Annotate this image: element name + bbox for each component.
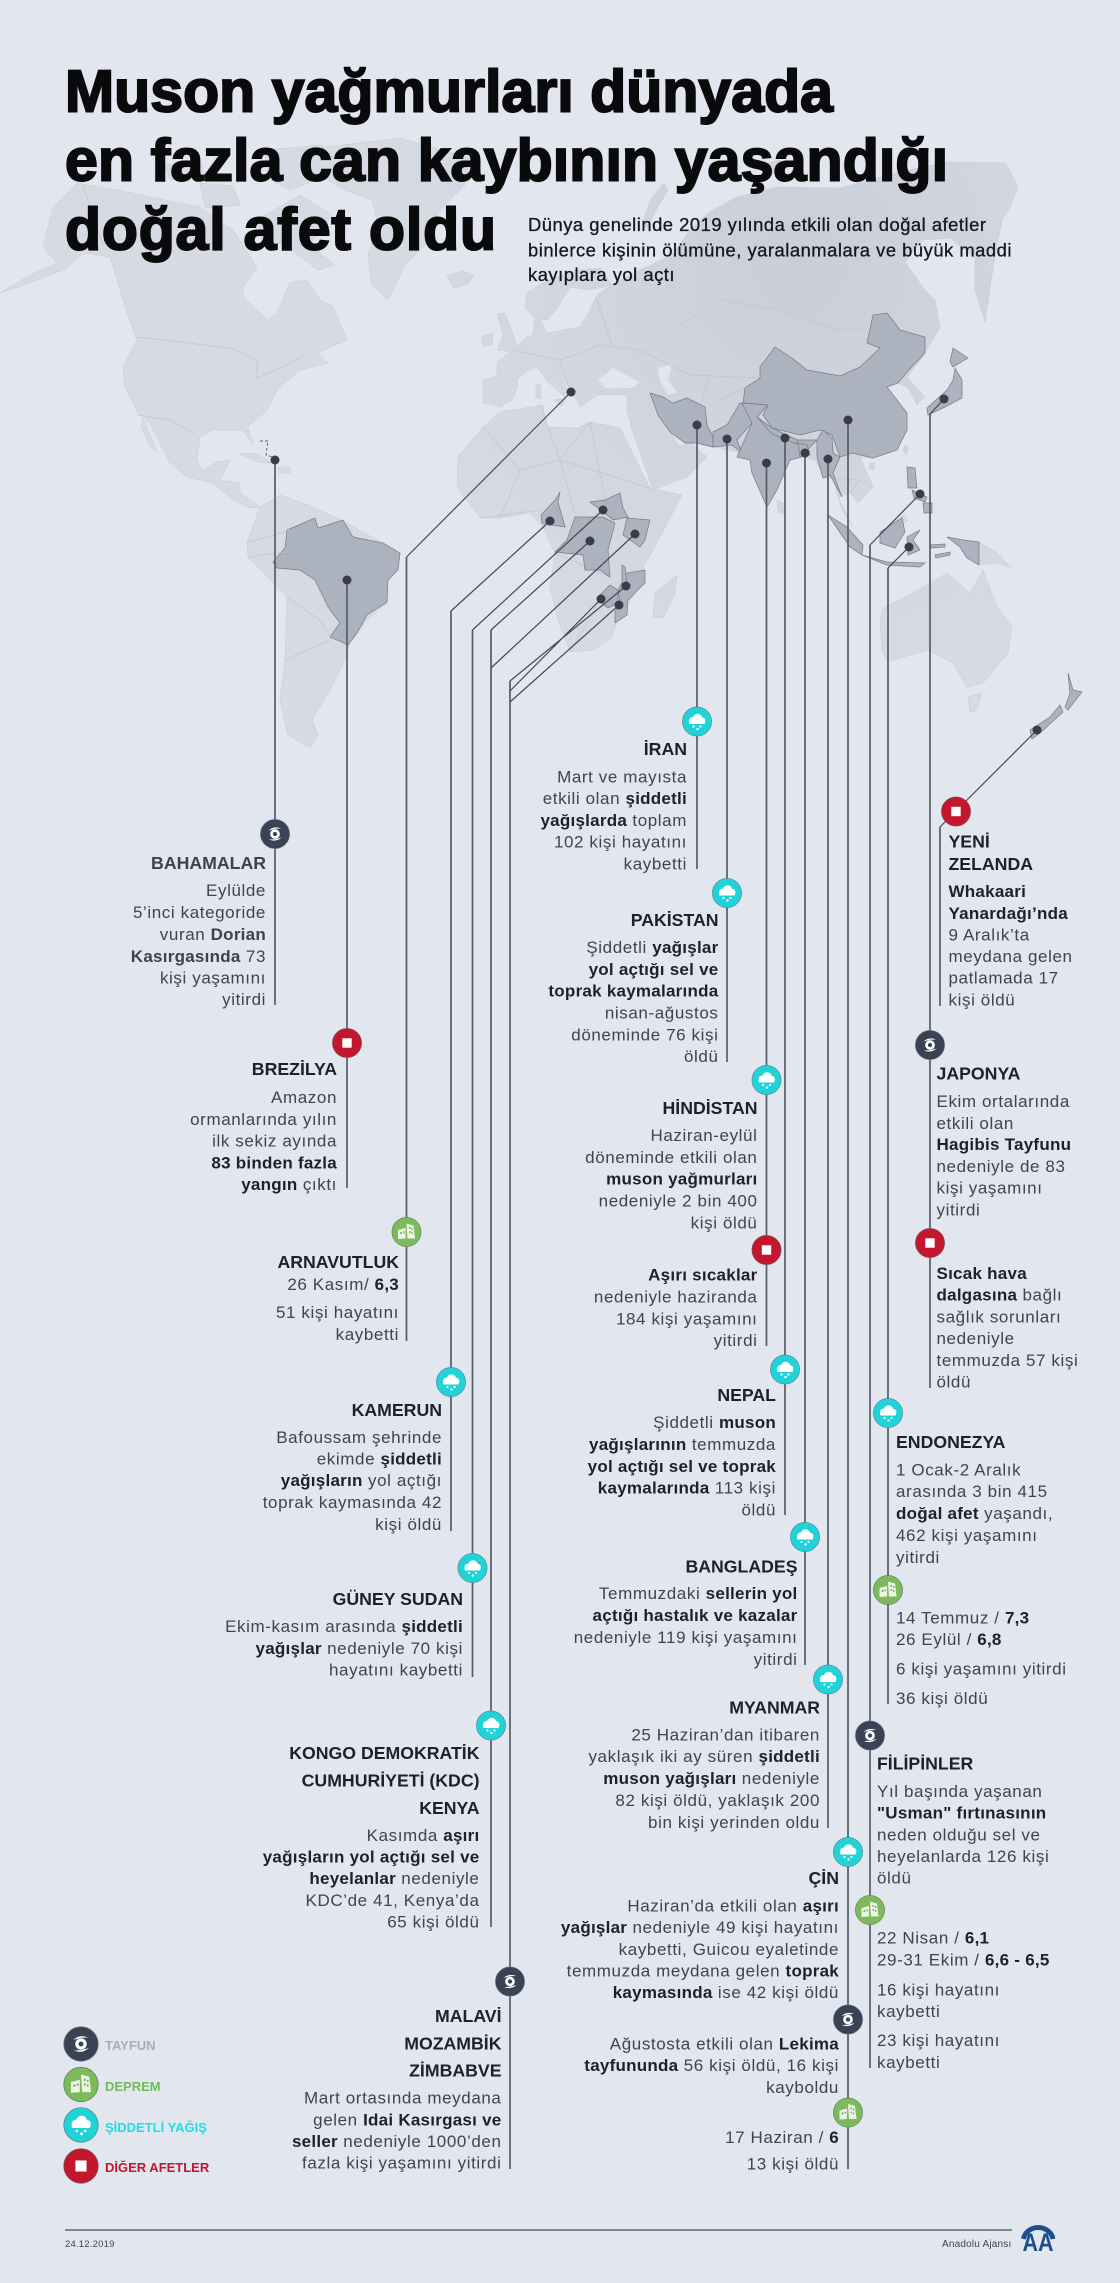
- map: Zimbabwe: [598, 585, 618, 608]
- text: Philippines earthquakes: 29-31 Ekim / 6,6 - 6,5: [877, 1950, 1050, 1970]
- map: Sumatra and Java: [828, 515, 925, 567]
- text: India monsoon: nedeniyle 2 bin 400: [599, 1192, 758, 1210]
- text: Indonesia disasters: [896, 1432, 1053, 1567]
- text: Myanmar: bin kişi yerinden oldu: [648, 1813, 820, 1832]
- text: Myanmar: 82 kişi öldü, yaklaşık 200: [615, 1791, 820, 1810]
- text: China typhoon: kayboldu: [766, 2078, 839, 2097]
- text: South Sudan: GÜNEY SUDAN: [333, 1589, 463, 1609]
- text: India heat: yitirdi: [714, 1331, 758, 1350]
- text: Indonesia disasters: arasında 3 bin 415: [896, 1482, 1048, 1501]
- text: DRC and Kenya: Kasımda aşırı: [367, 1826, 480, 1845]
- text: Albania: ARNAVUTLUK: [277, 1252, 399, 1272]
- text: Pakistan: öldü: [684, 1047, 718, 1066]
- text: Albania: [276, 1252, 399, 1344]
- text: Bangladesh: Temmuzdaki sellerin yol: [599, 1584, 798, 1603]
- icon: heavy rain Iran: [682, 707, 712, 736]
- map: Madagascar: [653, 575, 677, 618]
- text: Iran: yağışlarda toplam: [540, 811, 687, 830]
- icon: typhoon Bahamas: [260, 819, 290, 849]
- text: DRC and Kenya: yağışların yol açtığı sel ve: [263, 1848, 480, 1866]
- text: Indonesia earthquakes: 14 Temmuz / 7,3: [896, 1608, 1029, 1628]
- text: Japan typhoon: yitirdi: [936, 1200, 980, 1220]
- text: Bangladesh: [574, 1556, 798, 1669]
- footer date: 24.12.2019: [65, 2239, 115, 2250]
- map: Myanmar: [817, 430, 842, 497]
- map: South America: [247, 495, 400, 748]
- text: Brazil: ilk sekiz ayında: [212, 1132, 337, 1150]
- text: Nepal: NEPAL: [717, 1385, 776, 1405]
- text: Myanmar: MYANMAR: [729, 1698, 820, 1718]
- text: Philippines earthquakes: [877, 1928, 1050, 2072]
- text: Pakistan: Şiddetli yağışlar: [586, 938, 719, 957]
- text: Bangladesh: BANGLADEŞ: [685, 1556, 798, 1576]
- icon: typhoon Japan: [915, 1030, 945, 1060]
- map: Indonesian small islands: [930, 544, 950, 558]
- text: Indonesia disasters: yitirdi: [896, 1548, 940, 1567]
- text: Japan typhoon: JAPONYA: [936, 1064, 1021, 1084]
- map: Sulawesi: [907, 530, 920, 555]
- icon: earthquake Philippines: [855, 1895, 885, 1925]
- subtitle: kayıplara yol açtı: [528, 264, 675, 285]
- icon: heavy rain DRC Kenya: [476, 1711, 506, 1740]
- text: Cameroon: toprak kaymasında 42: [263, 1493, 442, 1512]
- legend: [64, 2027, 210, 2183]
- text: China rains: kaymasında ise 42 kişi öldü: [613, 1983, 839, 2002]
- text: Philippines storm: "Usman" fırtınasının: [877, 1804, 1046, 1822]
- text: New Zealand: [948, 832, 1073, 1010]
- map: Kenya: [623, 518, 650, 547]
- text: New Zealand: Yanardağı’nda: [948, 904, 1068, 923]
- text: China rains: temmuzda meydana gelen toprak: [567, 1962, 839, 1980]
- text: Pakistan: PAKİSTAN: [631, 910, 718, 930]
- text: Japan heat wave: Sıcak hava: [936, 1264, 1027, 1283]
- text: Philippines earthquakes: 22 Nisan / 6,1: [877, 1928, 989, 1948]
- text: Japan typhoon: [936, 1064, 1071, 1220]
- icon: heavy rain China: [833, 1837, 863, 1867]
- text: Pakistan: döneminde 76 kişi: [571, 1026, 718, 1044]
- text: China earthquake: 13 kişi öldü: [747, 2154, 839, 2174]
- map: Iran: [650, 393, 713, 447]
- text: Philippines storm: [877, 1754, 1049, 1888]
- text: Nepal: kaymalarında 113 kişi: [598, 1478, 776, 1498]
- text: Japan typhoon: nedeniyle de 83: [936, 1157, 1066, 1176]
- text: Iran: [540, 739, 687, 874]
- text: Malawi Mozambique Zimbabwe: MOZAMBİK: [404, 2034, 502, 2054]
- legend: earthquake: [64, 2067, 161, 2102]
- map: Sri Lanka: [777, 500, 784, 513]
- text: Cameroon: yağışların yol açtığı: [281, 1471, 442, 1490]
- map: Africa: [457, 405, 682, 652]
- map: Indonesian New Guinea: [947, 537, 979, 565]
- text: Pakistan: nisan-ağustos: [605, 1004, 718, 1022]
- text: Japan heat wave: sağlık sorunları: [936, 1308, 1061, 1326]
- text: China rains: Haziran’da etkili olan aşırı: [627, 1896, 839, 1916]
- map: Borneo: [880, 518, 905, 548]
- map: Malaysia part of Borneo: [880, 515, 908, 535]
- text: Indonesia earthquakes: 36 kişi öldü: [896, 1689, 988, 1708]
- text: Indonesia disasters: 1 Ocak-2 Aralık: [896, 1460, 1021, 1480]
- text: Myanmar: yaklaşık iki ay süren şiddetli: [588, 1747, 820, 1766]
- text: China rains: [561, 1868, 839, 2002]
- text: Cameroon: Bafoussam şehrinde: [276, 1428, 442, 1447]
- map: Philippines: [907, 467, 932, 513]
- text: Bahamas: BAHAMALAR: [151, 853, 266, 873]
- icon: heavy rain Nepal: [770, 1355, 800, 1384]
- text: Philippines storm: neden olduğu sel ve: [877, 1826, 1041, 1844]
- icon: other disaster Brazil: [332, 1028, 362, 1058]
- text: Japan typhoon: Ekim ortalarında: [936, 1092, 1070, 1111]
- title: doğal afet oldu: [65, 196, 496, 262]
- map: Eurasia: [483, 162, 1018, 527]
- text: Cameroon: kişi öldü: [375, 1515, 442, 1534]
- text: Bangladesh: nedeniyle 119 kişi yaşamını: [574, 1628, 798, 1647]
- map: Taiwan and Hainan: [869, 445, 909, 470]
- map: New Zealand: [1030, 673, 1082, 739]
- text: Nepal: Şiddetli muson: [653, 1413, 776, 1432]
- icon: heavy rain Indonesia: [873, 1398, 903, 1428]
- legend: other disasters: DİĞER AFETLER: [105, 2160, 210, 2175]
- map: Bangladesh: [798, 443, 810, 457]
- map: Pakistan: [713, 403, 752, 453]
- text: Japan heat wave: [936, 1264, 1078, 1392]
- text: Brazil: BREZİLYA: [252, 1059, 337, 1079]
- text: New Zealand: meydana gelen: [948, 947, 1073, 966]
- text: New Zealand: patlamada 17: [948, 968, 1059, 988]
- legend: earthquake: DEPREM: [105, 2079, 161, 2094]
- map: Japan: [927, 348, 968, 415]
- map: Scandinavia: [525, 268, 612, 320]
- text: Philippines earthquakes: kaybetti: [877, 2002, 940, 2021]
- text: Japan heat wave: temmuzda 57 kişi: [936, 1351, 1078, 1370]
- subtitle: Dünya genelinde 2019 yılında etkili olan doğal afetler: [528, 214, 986, 235]
- text: India heat: nedeniyle haziranda: [594, 1288, 758, 1306]
- text: India heat: [594, 1266, 758, 1350]
- map: Malawi: [622, 565, 627, 588]
- icon: typhoon Malawi Mozambique Zimbabwe: [495, 1967, 525, 1996]
- map: Papua New Guinea: [979, 542, 1012, 568]
- text: Nepal: öldü: [741, 1500, 776, 1520]
- map: China: [743, 313, 925, 458]
- text: South Sudan: Ekim-kasım arasında şiddetli: [225, 1617, 463, 1636]
- text: Bahamas: [131, 853, 266, 1009]
- map: Novaya Zemlya and Arctic islands: [642, 160, 785, 228]
- text: Albania: 51 kişi hayatını: [276, 1303, 399, 1322]
- map: Bahamas: [260, 441, 276, 458]
- text: DRC and Kenya: CUMHURİYETİ (KDC): [302, 1770, 480, 1790]
- text: New Zealand: 9 Aralık’ta: [948, 926, 1030, 944]
- text: Philippines storm: FİLİPİNLER: [877, 1754, 974, 1774]
- text: Bangladesh: yitirdi: [754, 1650, 798, 1669]
- text: Iran: kaybetti: [624, 854, 687, 874]
- icon: Anadolu Agency logo: AA: [1022, 2229, 1054, 2257]
- legend: heavy rain: [64, 2108, 207, 2142]
- map: North America: [0, 183, 347, 508]
- text: Philippines earthquakes: kaybetti: [877, 2053, 940, 2072]
- icon: typhoon China: [833, 2005, 863, 2034]
- text: Iran: Mart ve mayısta: [557, 768, 687, 786]
- text: Bahamas: yitirdi: [222, 990, 266, 1009]
- icon: earthquake China: [833, 2098, 863, 2127]
- text: New Zealand: ZELANDA: [948, 854, 1033, 874]
- footer agency name: Anadolu Ajansı: [942, 2239, 1012, 2250]
- text: Albania: 26 Kasım/ 6,3: [287, 1275, 399, 1294]
- map: Caspian Sea: [658, 364, 677, 395]
- text: Myanmar: [588, 1698, 820, 1832]
- text: Bahamas: Eylülde: [206, 881, 266, 900]
- map: Cameroon: [541, 492, 565, 527]
- text: Iran: etkili olan şiddetli: [543, 789, 687, 808]
- text: India heat: 184 kişi yaşamını: [616, 1310, 758, 1328]
- text: India monsoon: Haziran-eylül: [650, 1126, 758, 1145]
- map: India: [737, 403, 817, 507]
- title: en fazla can kaybının yaşandığı: [65, 128, 948, 194]
- text: Pakistan: yol açtığı sel ve: [589, 960, 718, 979]
- icon: other disaster New Zealand: [941, 797, 971, 826]
- text: India monsoon: HİNDİSTAN: [663, 1098, 758, 1118]
- icon: earthquake Indonesia: [873, 1575, 903, 1605]
- map: Nepal: [757, 417, 797, 444]
- text: Malawi Mozambique Zimbabwe: Mart ortasında meydana: [304, 2088, 502, 2108]
- text: China rains: kaybetti, Guicou eyaletinde: [619, 1940, 839, 1959]
- icon: typhoon Philippines: [855, 1721, 885, 1750]
- text: Japan typhoon: etkili olan: [936, 1114, 1014, 1133]
- text: Brazil: [190, 1059, 337, 1194]
- text: South Sudan: hayatını kaybetti: [329, 1660, 463, 1680]
- subtitle: [528, 214, 1012, 285]
- map: Mediterranean islands: [536, 385, 566, 406]
- text: Nepal: yağışlarının temmuzda: [589, 1435, 776, 1454]
- text: China typhoon: tayfununda 56 kişi öldü, 16 kişi: [584, 2056, 839, 2075]
- map: border lines: [83, 185, 890, 660]
- title: [65, 58, 948, 262]
- text: Nepal: yol açtığı sel ve toprak: [588, 1457, 776, 1476]
- text: China rains: ÇİN: [809, 1868, 839, 1888]
- map: Brazil: [273, 518, 400, 645]
- connector lines: [270, 388, 1042, 2169]
- text: Cameroon: ekimde şiddetli: [317, 1450, 442, 1468]
- text: India monsoon: [585, 1098, 758, 1232]
- text: Philippines earthquakes: 16 kişi hayatını: [877, 1980, 1000, 2000]
- text: Brazil: Amazon: [271, 1088, 337, 1107]
- text: China typhoon: [584, 2034, 839, 2097]
- text: Iran: 102 kişi hayatını: [554, 832, 687, 852]
- text: Philippines storm: Yıl başında yaşanan: [877, 1782, 1042, 1801]
- text: Bahamas: 5’inci kategoride: [133, 903, 266, 922]
- text: DRC and Kenya: KONGO DEMOKRATİK: [289, 1743, 480, 1763]
- text: Nepal: [588, 1385, 776, 1520]
- text: Japan heat wave: nedeniyle: [936, 1329, 1015, 1348]
- text: Bangladesh: açtığı hastalık ve kazalar: [593, 1606, 798, 1625]
- text: DRC and Kenya: heyelanlar nedeniyle: [309, 1869, 480, 1888]
- icon: heavy rain Cameroon: [436, 1367, 466, 1397]
- subtitle: binlerce kişinin ölümüne, yaralanmalara ve büyük maddi: [528, 240, 1012, 260]
- text: Philippines earthquakes: 23 kişi hayatını: [877, 2031, 1000, 2050]
- text: New Zealand: kişi öldü: [948, 990, 1015, 1010]
- text: New Zealand: Whakaari: [948, 882, 1026, 901]
- footer rule: [65, 2229, 1012, 2231]
- map: South Sudan: [590, 493, 628, 520]
- map: British Isles: [482, 313, 517, 352]
- title: Muson yağmurları dünyada: [65, 58, 834, 124]
- map: Black Sea: [598, 368, 640, 388]
- text: DRC and Kenya: [263, 1743, 480, 1932]
- text: Pakistan: toprak kaymalarında: [548, 982, 719, 1000]
- text: South Sudan: [225, 1589, 463, 1680]
- legend: heavy rain: ŞİDDETLİ YAĞIŞ: [105, 2120, 207, 2135]
- text: China typhoon: Ağustosta etkili olan Lekima: [610, 2034, 839, 2054]
- text: Philippines storm: öldü: [877, 1868, 912, 1888]
- icon: heavy rain Pakistan: [712, 878, 742, 908]
- text: China earthquake: 17 Haziran / 6: [725, 2128, 839, 2147]
- legend: typhoon: TAYFUN: [105, 2038, 156, 2053]
- text: Malawi Mozambique Zimbabwe: MALAVİ: [435, 2006, 502, 2026]
- text: Indonesia earthquakes: 6 kişi yaşamını yitirdi: [896, 1660, 1067, 1678]
- map: Baja California: [141, 419, 157, 452]
- text: Malawi Mozambique Zimbabwe: seller nedeniyle 1000’den: [292, 2132, 502, 2151]
- legend: other disasters: [64, 2149, 210, 2183]
- text: Myanmar: 25 Haziran’dan itibaren: [631, 1726, 820, 1744]
- icon: heavy rain Bangladesh: [790, 1522, 820, 1552]
- map: Tasmania: [968, 693, 982, 712]
- world map: [0, 138, 1082, 748]
- map: Iceland: [447, 271, 474, 288]
- text: Iran: İRAN: [644, 739, 687, 759]
- text: Philippines storm: heyelanlarda 126 kişi: [877, 1847, 1049, 1866]
- text: Indonesia disasters: doğal afet yaşandı,: [896, 1504, 1053, 1523]
- text: Cameroon: KAMERUN: [352, 1400, 442, 1420]
- text: Malawi Mozambique Zimbabwe: ZİMBABVE: [409, 2060, 502, 2080]
- text: Japan typhoon: kişi yaşamını: [936, 1178, 1043, 1198]
- text: Bahamas: vuran Dorian: [160, 925, 266, 944]
- text: India monsoon: kişi öldü: [691, 1214, 758, 1232]
- icon: heavy rain Myanmar: [813, 1665, 843, 1694]
- map: DR Congo: [555, 517, 615, 577]
- text: Japan typhoon: Hagibis Tayfunu: [936, 1135, 1071, 1154]
- text: Malawi Mozambique Zimbabwe: fazla kişi yaşamını yitirdi: [302, 2154, 502, 2172]
- text: Brazil: ormanlarında yılın: [190, 1110, 337, 1129]
- text: Malawi Mozambique Zimbabwe: [292, 2006, 502, 2172]
- text: Brazil: yangın çıktı: [241, 1175, 337, 1194]
- map: Mozambique: [615, 570, 645, 623]
- map: Greenland: [300, 138, 470, 300]
- text: Japan heat wave: dalgasına bağlı: [936, 1286, 1062, 1304]
- icon: heavy rain South Sudan: [458, 1553, 487, 1583]
- text: South Sudan: yağışlar nedeniyle 70 kişi: [256, 1639, 463, 1658]
- map: Arctic islands: [165, 145, 335, 270]
- text: Indonesia disasters: ENDONEZYA: [896, 1432, 1006, 1452]
- icon: earthquake Albania: [392, 1217, 421, 1247]
- icon: heavy rain India: [752, 1065, 781, 1095]
- text: New Zealand: YENİ: [948, 832, 990, 852]
- map: Australia: [880, 570, 1012, 687]
- icon: other disaster India: [752, 1235, 781, 1265]
- text: India monsoon: muson yağmurları: [606, 1170, 758, 1188]
- text: Pakistan: [548, 910, 719, 1066]
- text: Cameroon: [263, 1400, 442, 1534]
- map: Caribbean islands: [240, 453, 290, 473]
- legend: typhoon: [64, 2027, 156, 2061]
- text: Indonesia earthquakes: [896, 1608, 1067, 1708]
- text: Albania: kaybetti: [336, 1325, 399, 1344]
- text: DRC and Kenya: KDC’de 41, Kenya’da: [306, 1891, 480, 1910]
- text: China earthquake: [725, 2128, 839, 2174]
- text: Myanmar: muson yağışları nedeniyle: [603, 1769, 820, 1788]
- text: Indonesia earthquakes: 26 Eylül / 6,8: [896, 1630, 1002, 1649]
- text: Japan heat wave: öldü: [936, 1372, 971, 1392]
- text: Indonesia disasters: 462 kişi yaşamını: [896, 1526, 1038, 1545]
- text: DRC and Kenya: 65 kişi öldü: [387, 1912, 480, 1932]
- text: DRC and Kenya: KENYA: [419, 1798, 480, 1818]
- text: India heat: Aşırı sıcaklar: [648, 1266, 758, 1284]
- icon: other disaster Japan: [915, 1228, 945, 1258]
- text: India monsoon: döneminde etkili olan: [585, 1148, 758, 1167]
- text: Bahamas: kişi yaşamını: [160, 968, 266, 988]
- text: Brazil: 83 binden fazla: [211, 1154, 337, 1172]
- text: China rains: yağışlar nedeniyle 49 kişi hayatını: [561, 1918, 839, 1937]
- text: Bahamas: Kasırgasında 73: [131, 947, 266, 966]
- text: Malawi Mozambique Zimbabwe: gelen Idai Kasırgası ve: [313, 2110, 502, 2130]
